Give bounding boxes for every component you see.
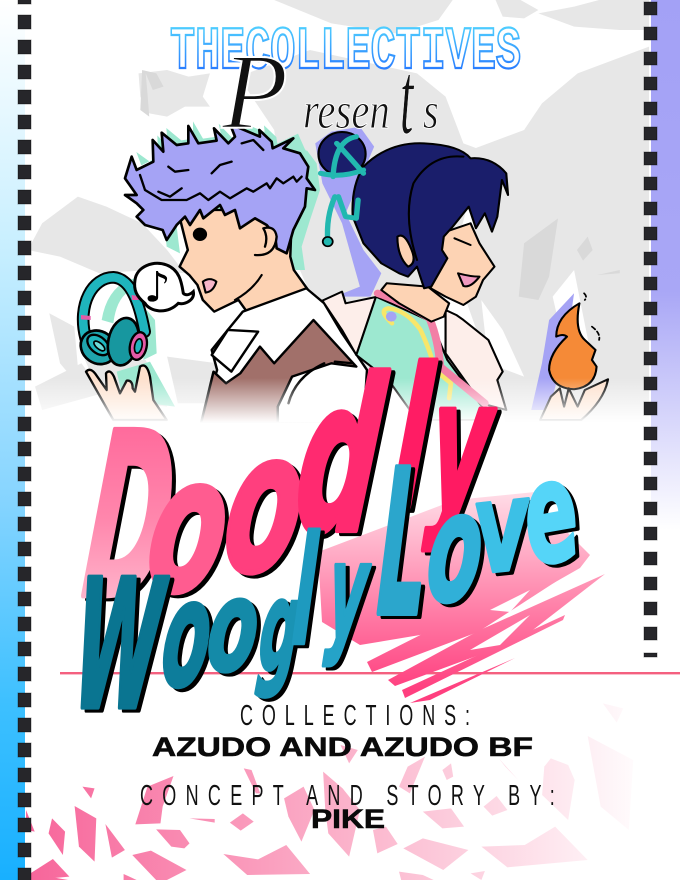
eye [193,228,207,241]
purple hair [125,124,315,255]
face and neck [178,210,308,315]
icon: music note speech bubble [135,263,194,312]
music note: ♪ [144,263,171,312]
neck [381,283,449,322]
collar [212,330,258,372]
right gradient strip [651,0,680,530]
title: Doodly: d [287,335,394,580]
lavender flame shadow [531,293,574,410]
title: Love [374,428,590,661]
hand holding flame [540,379,608,420]
teal ribbons [321,137,363,242]
yellow ornament [384,308,451,398]
pink trim [378,293,485,403]
heading: Concept and story by: CONCEPT AND STORY BY: [140,780,555,812]
title: Woogly: o [201,554,266,701]
title: Love: o [421,462,490,636]
brown vest [201,320,356,423]
hand holding headphones [86,365,167,420]
heading: Presents: P [221,33,288,152]
hair parting [409,156,463,260]
title: Doodly: D [75,386,185,649]
fade of the illustration into white [25,378,651,438]
title: Love: e [510,431,590,597]
ear [397,236,414,267]
hair bun [318,132,366,176]
title: Doodly: o [136,418,242,635]
pink band marks [81,295,139,320]
fur collar left [322,292,378,355]
heading: Collections: COLLECTIONS: [240,700,470,732]
boy character [125,119,367,423]
pink scribble [318,492,605,703]
icon: flame and hand [531,293,608,420]
title: Woogly: g [253,554,308,700]
pink divider rule [60,672,680,674]
sleeve line [288,362,353,403]
title: Love: v [466,453,539,603]
title: Doodly: l [385,329,440,553]
heading: Presents: resen [303,82,390,140]
title: Doodly [75,329,502,649]
smile [458,273,479,286]
title: Woogly: y [322,516,376,669]
title: Woogly: l [289,506,321,679]
left ear cup [74,324,123,371]
text: Azudo and Azudo BF: AZUDO AND AZUDO BF [152,732,533,762]
lavender outline shadow behind girl [315,127,381,297]
pink shard pattern [26,703,633,880]
right ear cup [104,315,143,368]
mouth [203,279,216,293]
title: Woogly: W [68,543,172,750]
navy hair [353,143,508,288]
girl character [315,127,508,420]
title: THECOLLECTIVES: THECOLLECTIVES [170,19,521,87]
hair strands [140,140,302,200]
grey map backdrop [28,0,649,423]
orange flame [549,303,597,389]
fur collar right [446,310,506,410]
right spiral binding holes [644,2,657,657]
heading: Presents: s [423,83,439,140]
mint shadow [102,277,175,407]
flame sparks [584,293,599,340]
closed eye [454,238,471,245]
text: Pike: PIKE [311,804,385,834]
left gradient strip [0,0,25,880]
title: Doodly: o [212,392,318,617]
heading: Presents: t [400,41,415,156]
title: Doodly: y [422,340,502,554]
icon: headphones and hand [74,277,175,420]
headband [83,277,145,338]
face [424,223,494,305]
shirt [201,288,367,423]
heading: Presents [221,33,439,156]
mint jacket [356,297,492,420]
left spiral binding holes [18,0,31,880]
title: Love: L [374,428,434,661]
title: Woogly: o [155,550,220,719]
ear [255,228,277,255]
title: Woogly [68,506,376,750]
mint shadow behind hair [136,119,320,270]
